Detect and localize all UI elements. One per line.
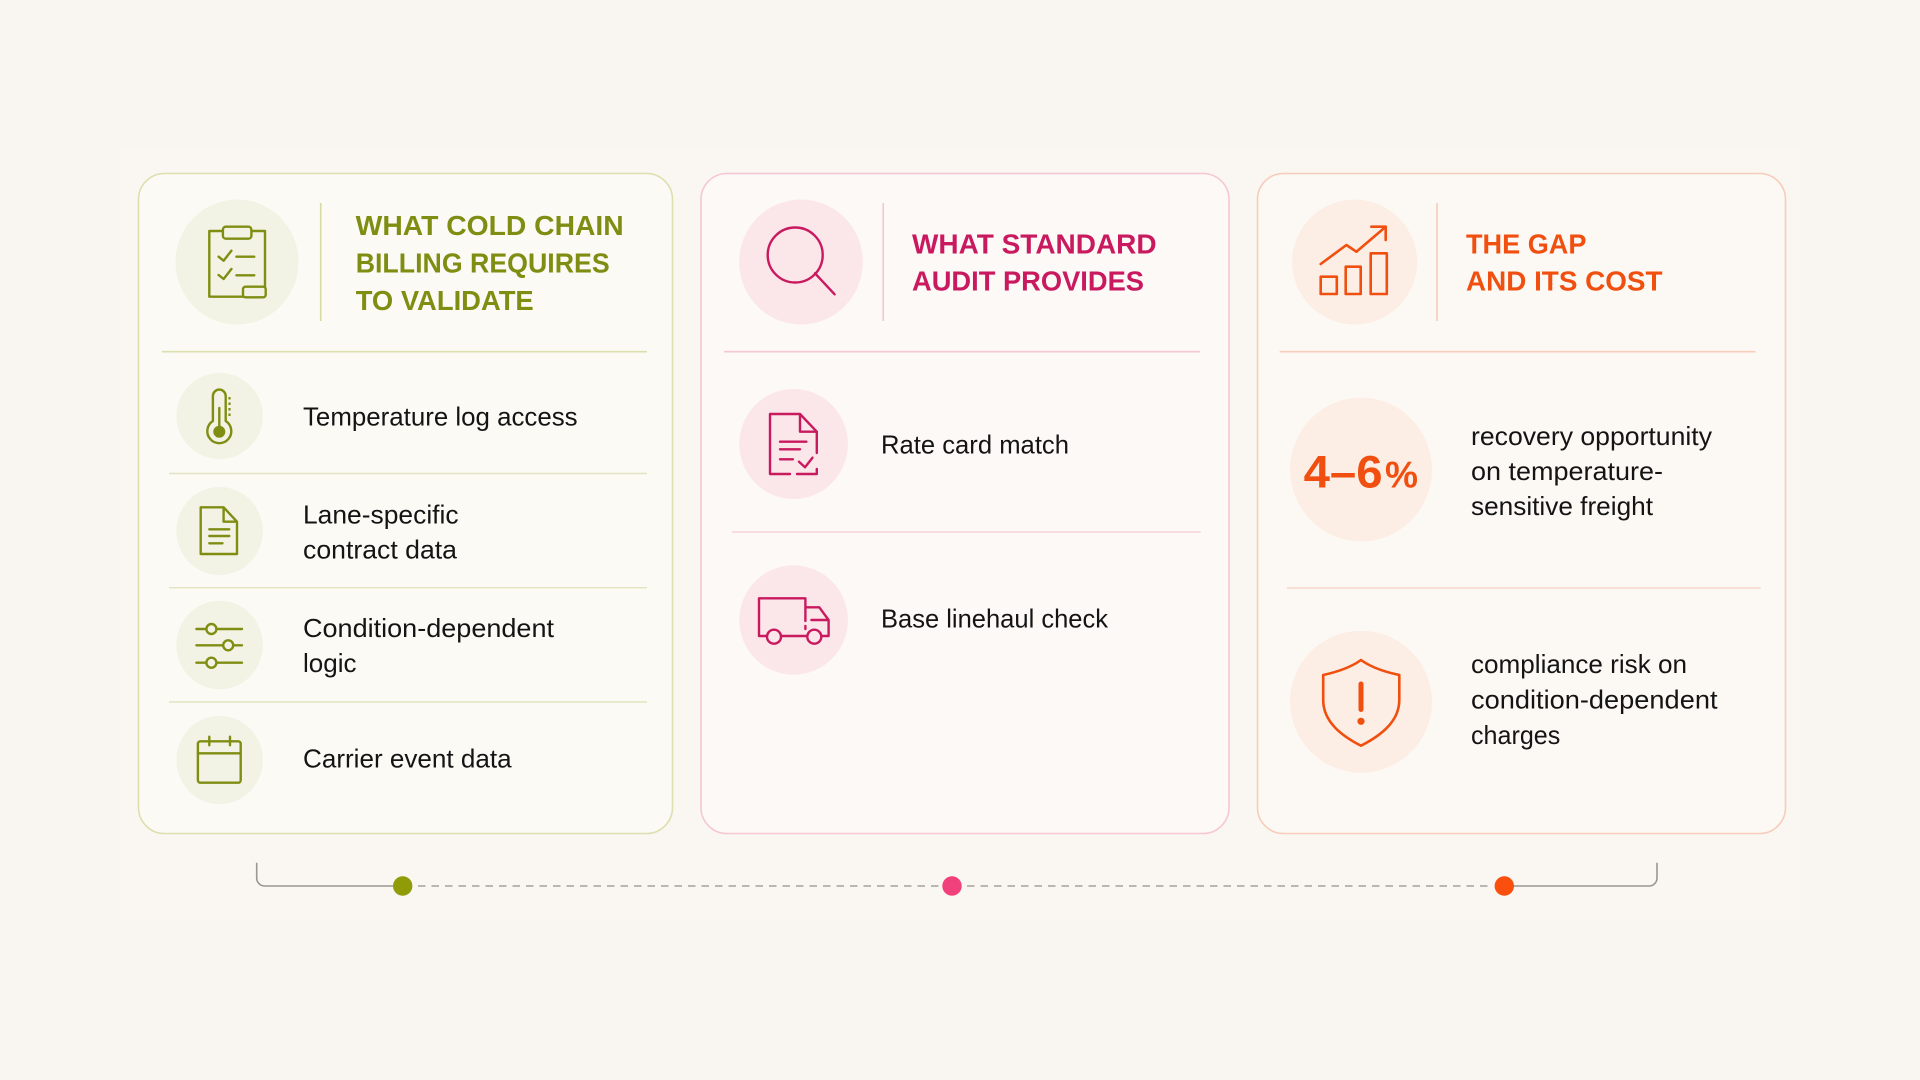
stat circle: 4-6 percent: 4–6 xyxy=(1304,446,1383,497)
heading: standard audit: WHAT STANDARD xyxy=(912,228,1157,259)
heading: cold chain xyxy=(356,210,624,316)
icon: growth chart xyxy=(1292,200,1417,324)
stat: recovery opportunity: recovery opportunity xyxy=(1471,421,1712,451)
stat: compliance risk: condition-dependent xyxy=(1471,684,1718,714)
stat: compliance risk: charges xyxy=(1471,720,1560,750)
heading: the gap: AND ITS COST xyxy=(1466,266,1662,297)
stat circle: 4-6 percent: % xyxy=(1385,454,1418,495)
heading: the gap xyxy=(1466,228,1662,297)
heading: standard audit xyxy=(912,228,1157,297)
timeline connector xyxy=(257,863,1657,896)
heading: standard audit: AUDIT PROVIDES xyxy=(912,266,1144,297)
stat: recovery opportunity: sensitive freight xyxy=(1471,491,1654,521)
marker: pink dot xyxy=(942,876,962,896)
stat: recovery opportunity xyxy=(1290,398,1712,542)
icon: clipboard checklist xyxy=(176,200,298,324)
panel: the gap and its cost xyxy=(1258,174,1786,834)
row: carrier event data: Carrier event data xyxy=(303,743,512,773)
panel: what cold chain billing requires to validate xyxy=(138,174,672,834)
stat circle: 4-6 percent xyxy=(1290,398,1432,542)
heading: cold chain: TO VALIDATE xyxy=(356,285,534,316)
stat: compliance risk: compliance risk on xyxy=(1471,649,1687,679)
stat: compliance risk xyxy=(1290,631,1718,773)
icon: calendar xyxy=(176,716,263,804)
row: carrier event data xyxy=(176,716,512,804)
row: rate card match: Rate card match xyxy=(881,429,1069,459)
icon: document xyxy=(176,487,263,575)
icon: document with check xyxy=(739,389,848,499)
panel: what standard audit provides xyxy=(701,174,1229,834)
row: temperature log access: Temperature log access xyxy=(303,401,578,431)
icon: warning shield xyxy=(1290,631,1432,773)
row: condition-dependent logic xyxy=(176,601,555,689)
heading: cold chain: WHAT COLD CHAIN xyxy=(356,210,624,241)
heading: cold chain: BILLING REQUIRES xyxy=(356,248,610,278)
row: temperature log access xyxy=(176,373,578,459)
row: base linehaul check xyxy=(739,565,1109,675)
row: condition-dependent logic: logic xyxy=(303,648,356,678)
row: base linehaul check: Base linehaul check xyxy=(881,603,1109,633)
icon: sliders xyxy=(176,601,263,689)
icon: thermometer xyxy=(176,373,263,459)
icon: truck xyxy=(739,565,848,675)
marker: olive dot xyxy=(393,876,412,896)
stat: recovery opportunity: on temperature- xyxy=(1471,456,1663,486)
row: lane-specific contract data: Lane-specific xyxy=(303,499,459,529)
row: lane-specific contract data xyxy=(176,487,459,575)
row: lane-specific contract data: contract data xyxy=(303,534,458,564)
row: rate card match xyxy=(739,389,1069,499)
icon: magnifier xyxy=(739,200,863,324)
heading: the gap: THE GAP xyxy=(1466,228,1586,259)
marker: orange dot xyxy=(1495,876,1514,896)
row: condition-dependent logic: Condition-dependent xyxy=(303,613,555,643)
